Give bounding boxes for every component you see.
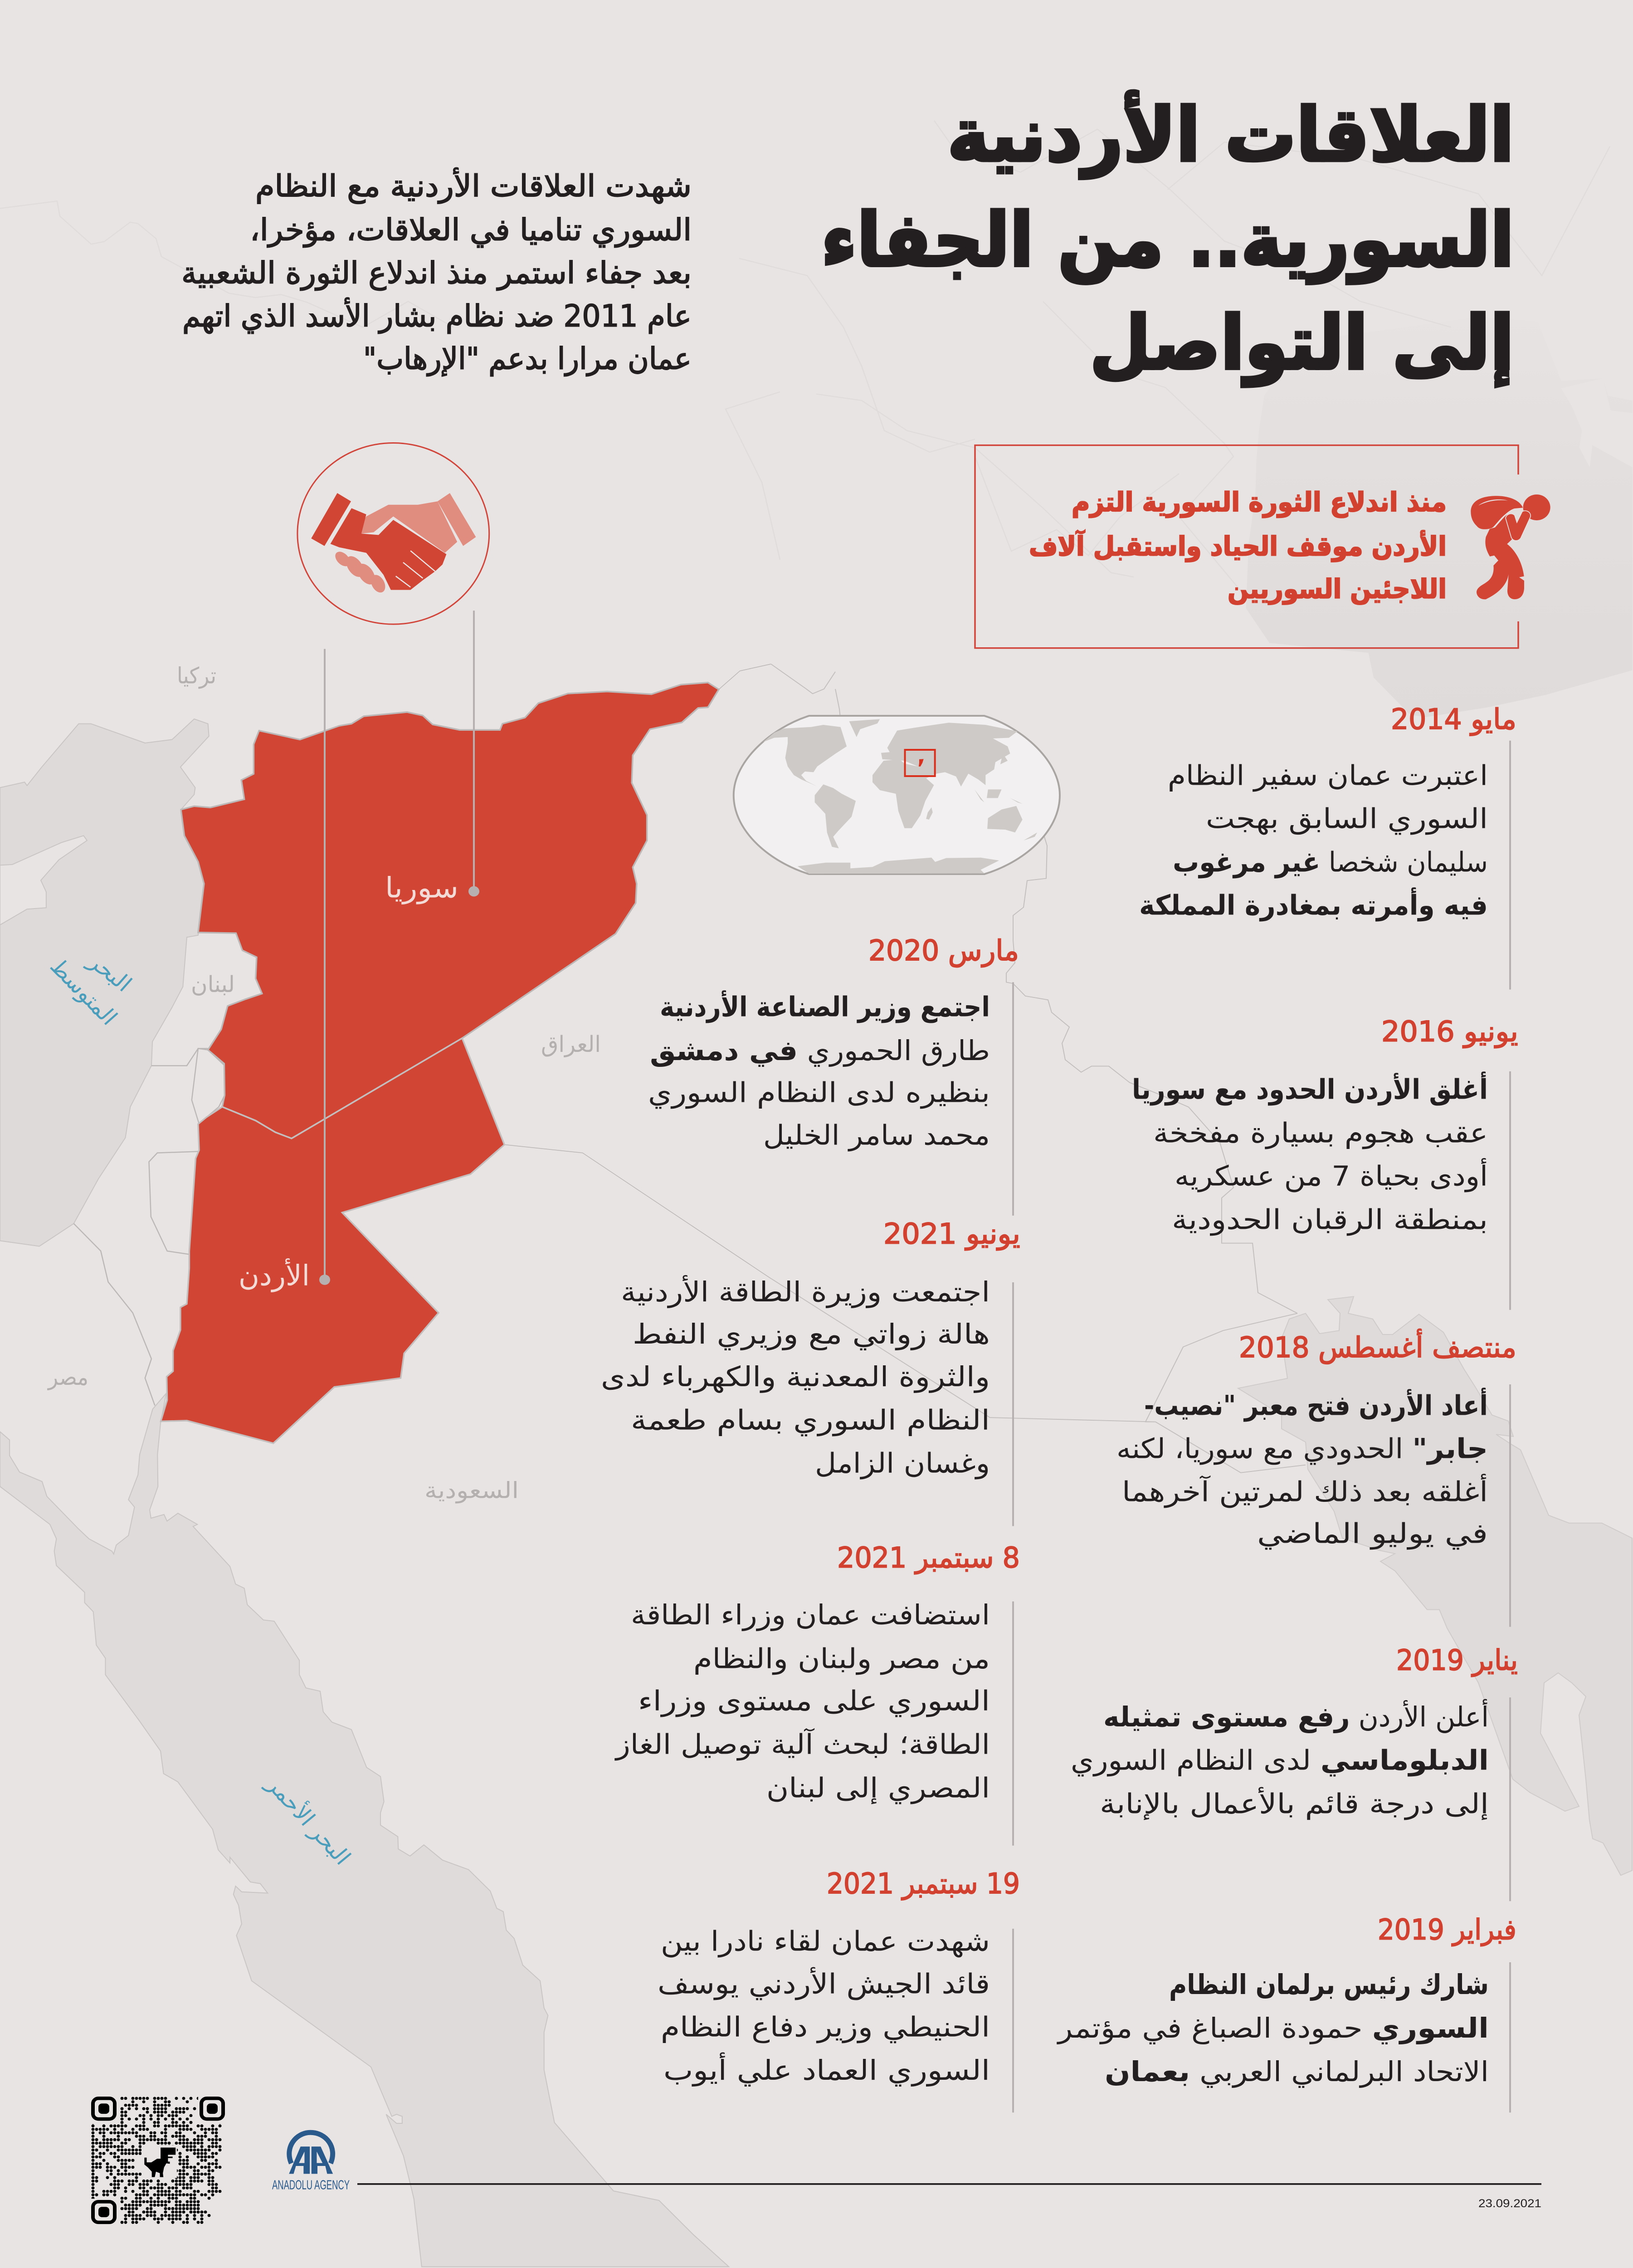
timeline entry: May 2014	[1139, 703, 1516, 990]
timeline entry: 8 September 2021: المصري إلى لبنان	[766, 1772, 990, 1804]
timeline entry: March 2020: طارق الحموري في دمشق	[650, 1035, 990, 1067]
leader line and label: Jordan	[239, 649, 330, 1292]
timeline entry: March 2020: اجتمع وزير الصناعة الأردنية	[660, 990, 990, 1023]
sea labels	[45, 948, 356, 1870]
timeline entry: 8 September 2021: الطاقة؛ لبحث آلية توصيل الغاز	[614, 1728, 990, 1760]
country labels	[47, 663, 601, 1504]
country labels: العراق	[541, 1031, 601, 1058]
timeline entry: mid August 2018: أغلقه بعد ذلك لمرتين آخرهما	[1122, 1473, 1488, 1508]
timeline entry: February 2019: فبراير 2019	[1378, 1913, 1516, 1946]
timeline entry: May 2014: اعتبرت عمان سفير النظام	[1168, 759, 1488, 792]
country labels: مصر	[47, 1364, 88, 1391]
leader line and label: Jordan: الأردن	[239, 1258, 310, 1292]
Jordan shape	[161, 1038, 504, 1443]
logo wordmark: ANADOLU AGENCY	[272, 2178, 350, 2192]
timeline entry: June 2016: أودى بحياة 7 من عسكريه	[1175, 1158, 1488, 1193]
timeline entry: mid August 2018: منتصف أغسطس 2018	[1239, 1329, 1516, 1364]
callout: refugees	[975, 445, 1550, 648]
icon: QR dinosaur	[144, 2147, 175, 2177]
timeline entry: 8 September 2021	[614, 1541, 1020, 1846]
timeline entry: June 2016: بمنطقة الرقبان الحدودية	[1172, 1203, 1488, 1236]
land borders	[771, 664, 1306, 1473]
timeline entry: June 2021: والثروة المعدنية والكهرباء لدى	[601, 1360, 990, 1393]
timeline entry: June 2021	[601, 1217, 1020, 1526]
title: إلى التواصل	[1090, 300, 1514, 387]
leader line and label: Syria: سوريا	[385, 871, 458, 904]
timeline entry: May 2014: سليمان شخصا غير مرغوب	[1173, 846, 1488, 878]
timeline entry: May 2014: مايو 2014	[1391, 703, 1516, 736]
title: العلاقات الأردنية	[947, 91, 1514, 179]
sea: Persian Gulf	[1238, 1296, 1632, 1875]
timeline entry: June 2021: وغسان الزامل	[815, 1447, 990, 1480]
callout text	[1029, 487, 1447, 605]
sea: Mediterranean and land borders near Syria	[0, 664, 771, 1406]
sea: Red Sea	[0, 1393, 729, 2267]
timeline entry: May 2014: السوري السابق بهجت	[1206, 802, 1488, 835]
timeline entry: 19 September 2021: 19 سبتمبر 2021	[827, 1867, 1020, 1901]
timeline entry: January 2019: أعلن الأردن رفع مستوى تمثيله	[1103, 1698, 1489, 1733]
country labels: تركيا	[177, 663, 216, 689]
faint northern borders	[0, 121, 1610, 599]
timeline entry: 8 September 2021: استضافت عمان وزراء الطاقة	[631, 1598, 990, 1631]
timeline entry: June 2016: عقب هجوم بسيارة مفخخة	[1153, 1117, 1488, 1149]
callout text: اللاجئين السوريين	[1228, 574, 1447, 605]
sea labels: البحر الأحمر	[261, 1770, 356, 1870]
Syria shape	[181, 683, 719, 1139]
timeline entry: March 2020: بنظيره لدى النظام السوري	[648, 1076, 990, 1109]
timeline entry: June 2021: النظام السوري بسام طعمة	[631, 1404, 990, 1436]
sea labels: المتوسط	[45, 954, 122, 1030]
timeline entry: 8 September 2021: السوري على مستوى وزراء	[638, 1685, 990, 1717]
country labels: لبنان	[191, 971, 235, 997]
timeline entry: 19 September 2021	[658, 1867, 1020, 2112]
QR code	[90, 2095, 226, 2224]
timeline entry: June 2021: هالة زواتي مع وزيري النفط	[633, 1318, 990, 1350]
timeline entry: mid August 2018: جابر" الحدودي مع سوريا، لكنه	[1116, 1432, 1488, 1465]
intro paragraph: السوري تناميا في العلاقات، مؤخرا،	[250, 213, 692, 248]
icon: handshake in circle	[297, 443, 489, 624]
title	[821, 91, 1514, 387]
timeline entry: June 2016: يونيو 2016	[1381, 1015, 1518, 1048]
timeline entry: January 2019: إلى درجة قائم بالأعمال بالإنابة	[1100, 1787, 1489, 1820]
title: السورية.. من الجفاء	[821, 197, 1514, 284]
timeline entry: February 2019: الاتحاد البرلماني العربي بعمان	[1105, 2056, 1489, 2088]
timeline entry: May 2014: فيه وأمرته بمغادرة المملكة	[1139, 887, 1488, 921]
intro paragraph	[181, 167, 692, 376]
timeline entry: 19 September 2021: السوري العماد علي أيوب	[663, 2052, 990, 2087]
logo mark	[289, 2132, 333, 2174]
globe outline	[734, 716, 1060, 874]
timeline entry: 19 September 2021: قائد الجيش الأردني يوسف	[658, 1967, 990, 2000]
callout text: الأردن موقف الحياد واستقبل آلاف	[1029, 530, 1447, 562]
callout frame	[975, 445, 1518, 648]
intro paragraph: شهدت العلاقات الأردنية مع النظام	[255, 167, 692, 204]
timeline entry: mid August 2018: أعاد الأردن فتح معبر "نصيب-	[1144, 1388, 1488, 1422]
leader line and label: Syria	[385, 611, 479, 904]
timeline entry: June 2021: يونيو 2021	[883, 1217, 1020, 1251]
timeline entry: January 2019	[1071, 1644, 1518, 1901]
icon: refugee carrying sack	[1471, 494, 1550, 599]
locator rectangle	[905, 750, 935, 776]
timeline entry: February 2019: السوري حمودة الصباغ في مؤتمر	[1057, 2012, 1489, 2044]
timeline entry: January 2019: الدبلوماسي لدى النظام السوري	[1071, 1744, 1489, 1776]
sea: Caspian region top right	[1246, 317, 1633, 717]
date stamp: 23.09.2021	[1478, 2198, 1541, 2210]
timeline entry: 8 September 2021: من مصر ولبنان والنظام	[693, 1642, 990, 1675]
intro paragraph: عام 2011 ضد نظام بشار الأسد الذي اتهم	[182, 297, 692, 334]
timeline entry: January 2019: يناير 2019	[1396, 1644, 1518, 1677]
timeline entry: June 2016	[1132, 1015, 1518, 1310]
callout text: منذ اندلاع الثورة السورية التزم	[1072, 487, 1447, 518]
country labels: السعودية	[424, 1477, 519, 1504]
timeline entry: February 2019	[1057, 1913, 1516, 2112]
timeline entry: March 2020: محمد سامر الخليل	[763, 1119, 990, 1151]
continents	[763, 719, 1037, 874]
footer rule	[357, 2183, 1541, 2185]
intro paragraph: عمان مرارا بدعم "الإرهاب"	[363, 342, 692, 376]
timeline entry: 19 September 2021: شهدت عمان لقاء نادرا بين	[661, 1925, 990, 1958]
QR finder patterns and dinosaur backing	[90, 2095, 226, 2224]
map: Syria and Jordan	[161, 683, 719, 1443]
timeline entry: mid August 2018	[1116, 1329, 1516, 1627]
timeline entry: 19 September 2021: الحنيطي وزير دفاع النظام	[661, 2011, 990, 2043]
timeline entry: March 2020: مارس 2020	[868, 934, 1019, 968]
timeline entry: 8 September 2021: 8 سبتمبر 2021	[837, 1541, 1020, 1574]
locator world map	[734, 716, 1060, 874]
intro paragraph: بعد جفاء استمر منذ اندلاع الثورة الشعبية	[181, 256, 692, 291]
timeline entry: March 2020	[648, 934, 1019, 1216]
timeline entry: June 2021: اجتمعت وزيرة الطاقة الأردنية	[621, 1275, 990, 1308]
Anadolu Agency logo	[272, 2132, 350, 2192]
timeline entry: February 2019: شارك رئيس برلمان النظام	[1169, 1969, 1489, 2001]
sea labels: البحر	[83, 948, 136, 997]
timeline entry: June 2016: أغلق الأردن الحدود مع سوريا	[1132, 1071, 1488, 1105]
timeline entry: mid August 2018: في يوليو الماضي	[1257, 1517, 1488, 1549]
